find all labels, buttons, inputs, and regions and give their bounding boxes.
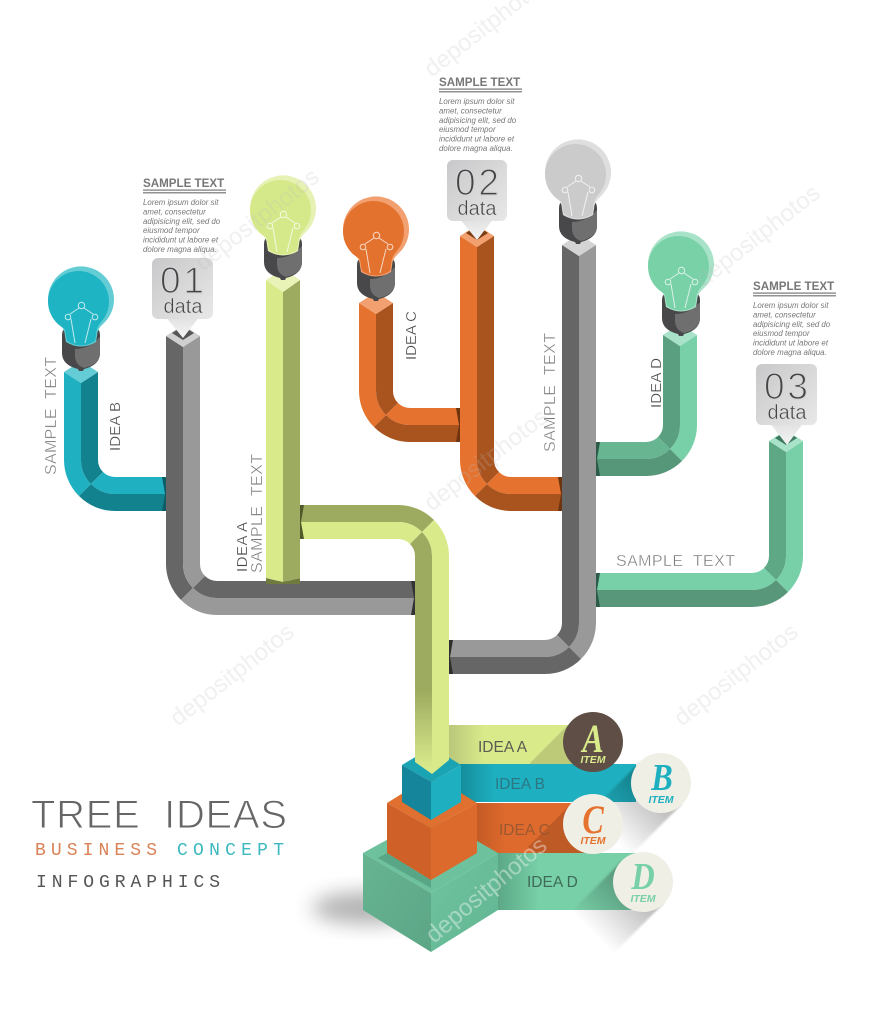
item badge B [631,753,691,813]
data tag 01: data [164,296,203,318]
pipe: grey left branch [166,325,415,615]
text block: right sample text: amet, consectetur [753,310,816,319]
item badge C: ITEM [580,835,606,847]
item badge C [563,794,623,854]
text block: right sample text: Lorem ipsum dolor sit [753,301,829,310]
text block: left sample text: adipisicing elit, sed do [143,217,221,226]
pipe labels: IDEA A [234,522,251,572]
circle shadows [570,762,682,955]
pipe: teal branch [64,361,166,511]
text block: left sample text: eiusmod tempor [143,226,200,235]
text block: right sample text: incididunt ut labore et [753,339,829,348]
icon: teal bulb [48,266,114,371]
label: idea C: IDEA C [499,822,550,839]
label: idea D: IDEA D [527,874,578,891]
text block: right sample text: adipisicing elit, sed do [753,320,831,329]
pipe labels: SAMPLE TEXT [616,553,735,570]
text block: left sample text: dolore magna aliqua. [143,245,217,254]
item badge C: C [582,798,604,842]
text block: centre sample text: dolore magna aliqua. [439,144,513,153]
ribbon: idea B [460,764,636,802]
text block: right sample text: SAMPLE TEXT [753,280,834,293]
item badge D [613,852,673,912]
pipe: orange branch C [359,292,460,442]
item badge B: B [650,757,673,799]
item badge A [563,712,623,772]
pipe: green branch 03 [596,430,803,607]
label: idea B: IDEA B [495,776,545,793]
text block: centre sample text: amet, consectetur [439,106,502,115]
ribbon: idea D [496,853,639,910]
text block: centre sample text: SAMPLE TEXT [439,76,520,89]
text block: right sample text [753,280,836,357]
data tag 02: data [458,198,497,220]
watermark: depositphotos [691,179,825,293]
base block: green [363,815,498,952]
subtitle: infographics: INFOGRAPHICS [36,873,220,893]
text block: centre sample text: incididunt ut labore et [439,135,515,144]
data tag 01 [152,258,213,338]
icon: green bulb [648,231,714,336]
watermark on base: depositphotos [421,832,552,949]
item badge D: ITEM [630,893,656,905]
item badge B: ITEM [648,794,674,806]
item badge D: D [630,856,655,898]
icon: orange bulb [343,196,409,301]
text block: left sample text: Lorem ipsum dolor sit [143,198,219,207]
pipe labels: SAMPLE TEXT [542,333,559,452]
pipe labels: IDEA B [107,402,124,451]
pipe labels: IDEA C [403,311,420,360]
text block: right sample text: eiusmod tempor [753,329,810,338]
pipe: lime trunk [300,505,449,774]
watermark [165,0,825,732]
text block: centre sample text: Lorem ipsum dolor sit [439,97,515,106]
subtitle: business concept: BUSINESS [35,841,157,861]
item badge A: ITEM [580,754,606,766]
text block: centre sample text: eiusmod tempor [439,125,496,134]
text block: left sample text [143,177,226,254]
icon: grey bulb [545,139,611,244]
ribbon: idea C [475,803,585,853]
pipe labels: SAMPLE TEXT [249,454,266,573]
text block: left sample text: SAMPLE TEXT [143,177,224,190]
ribbon: idea A [449,725,572,764]
data tag 01: 01 [160,260,204,301]
watermark: depositphotos [190,163,324,277]
text block: centre sample text [439,76,522,153]
base block: orange [387,775,477,880]
pipe labels: IDEA D [648,358,665,408]
text block: left sample text: amet, consectetur [143,207,206,216]
watermark: depositphotos [419,403,553,517]
subtitle: business concept: CONCEPT [177,841,284,861]
data tag 02: 02 [455,162,499,203]
icon: lime bulb [250,175,316,280]
text block: left sample text: incididunt ut labore et [143,236,219,245]
data tag 03: data [768,402,807,424]
base block: teal [402,747,461,820]
data tag 03 [756,364,817,445]
text block: right sample text: dolore magna aliqua. [753,348,827,357]
title: TREE IDEAS [31,793,287,837]
data tag 03: 03 [764,366,808,407]
watermark: depositphotos [165,618,299,732]
pipe: green branch D [596,324,697,476]
pipe labels: SAMPLE TEXT [43,357,60,475]
pipe: orange branch 02 [460,225,562,511]
watermark: depositphotos [669,618,803,732]
text block: centre sample text: adipisicing elit, sed do [439,116,517,125]
item badge A: A [581,717,604,761]
ground shadow [312,892,424,924]
data tag 02 [447,160,507,240]
pipe labels [43,311,735,573]
pipe: lime vertical branch [266,269,300,584]
pipe: grey main right branch [449,234,596,674]
label: idea A: IDEA A [478,739,528,756]
subtitle: business concept [35,841,284,861]
